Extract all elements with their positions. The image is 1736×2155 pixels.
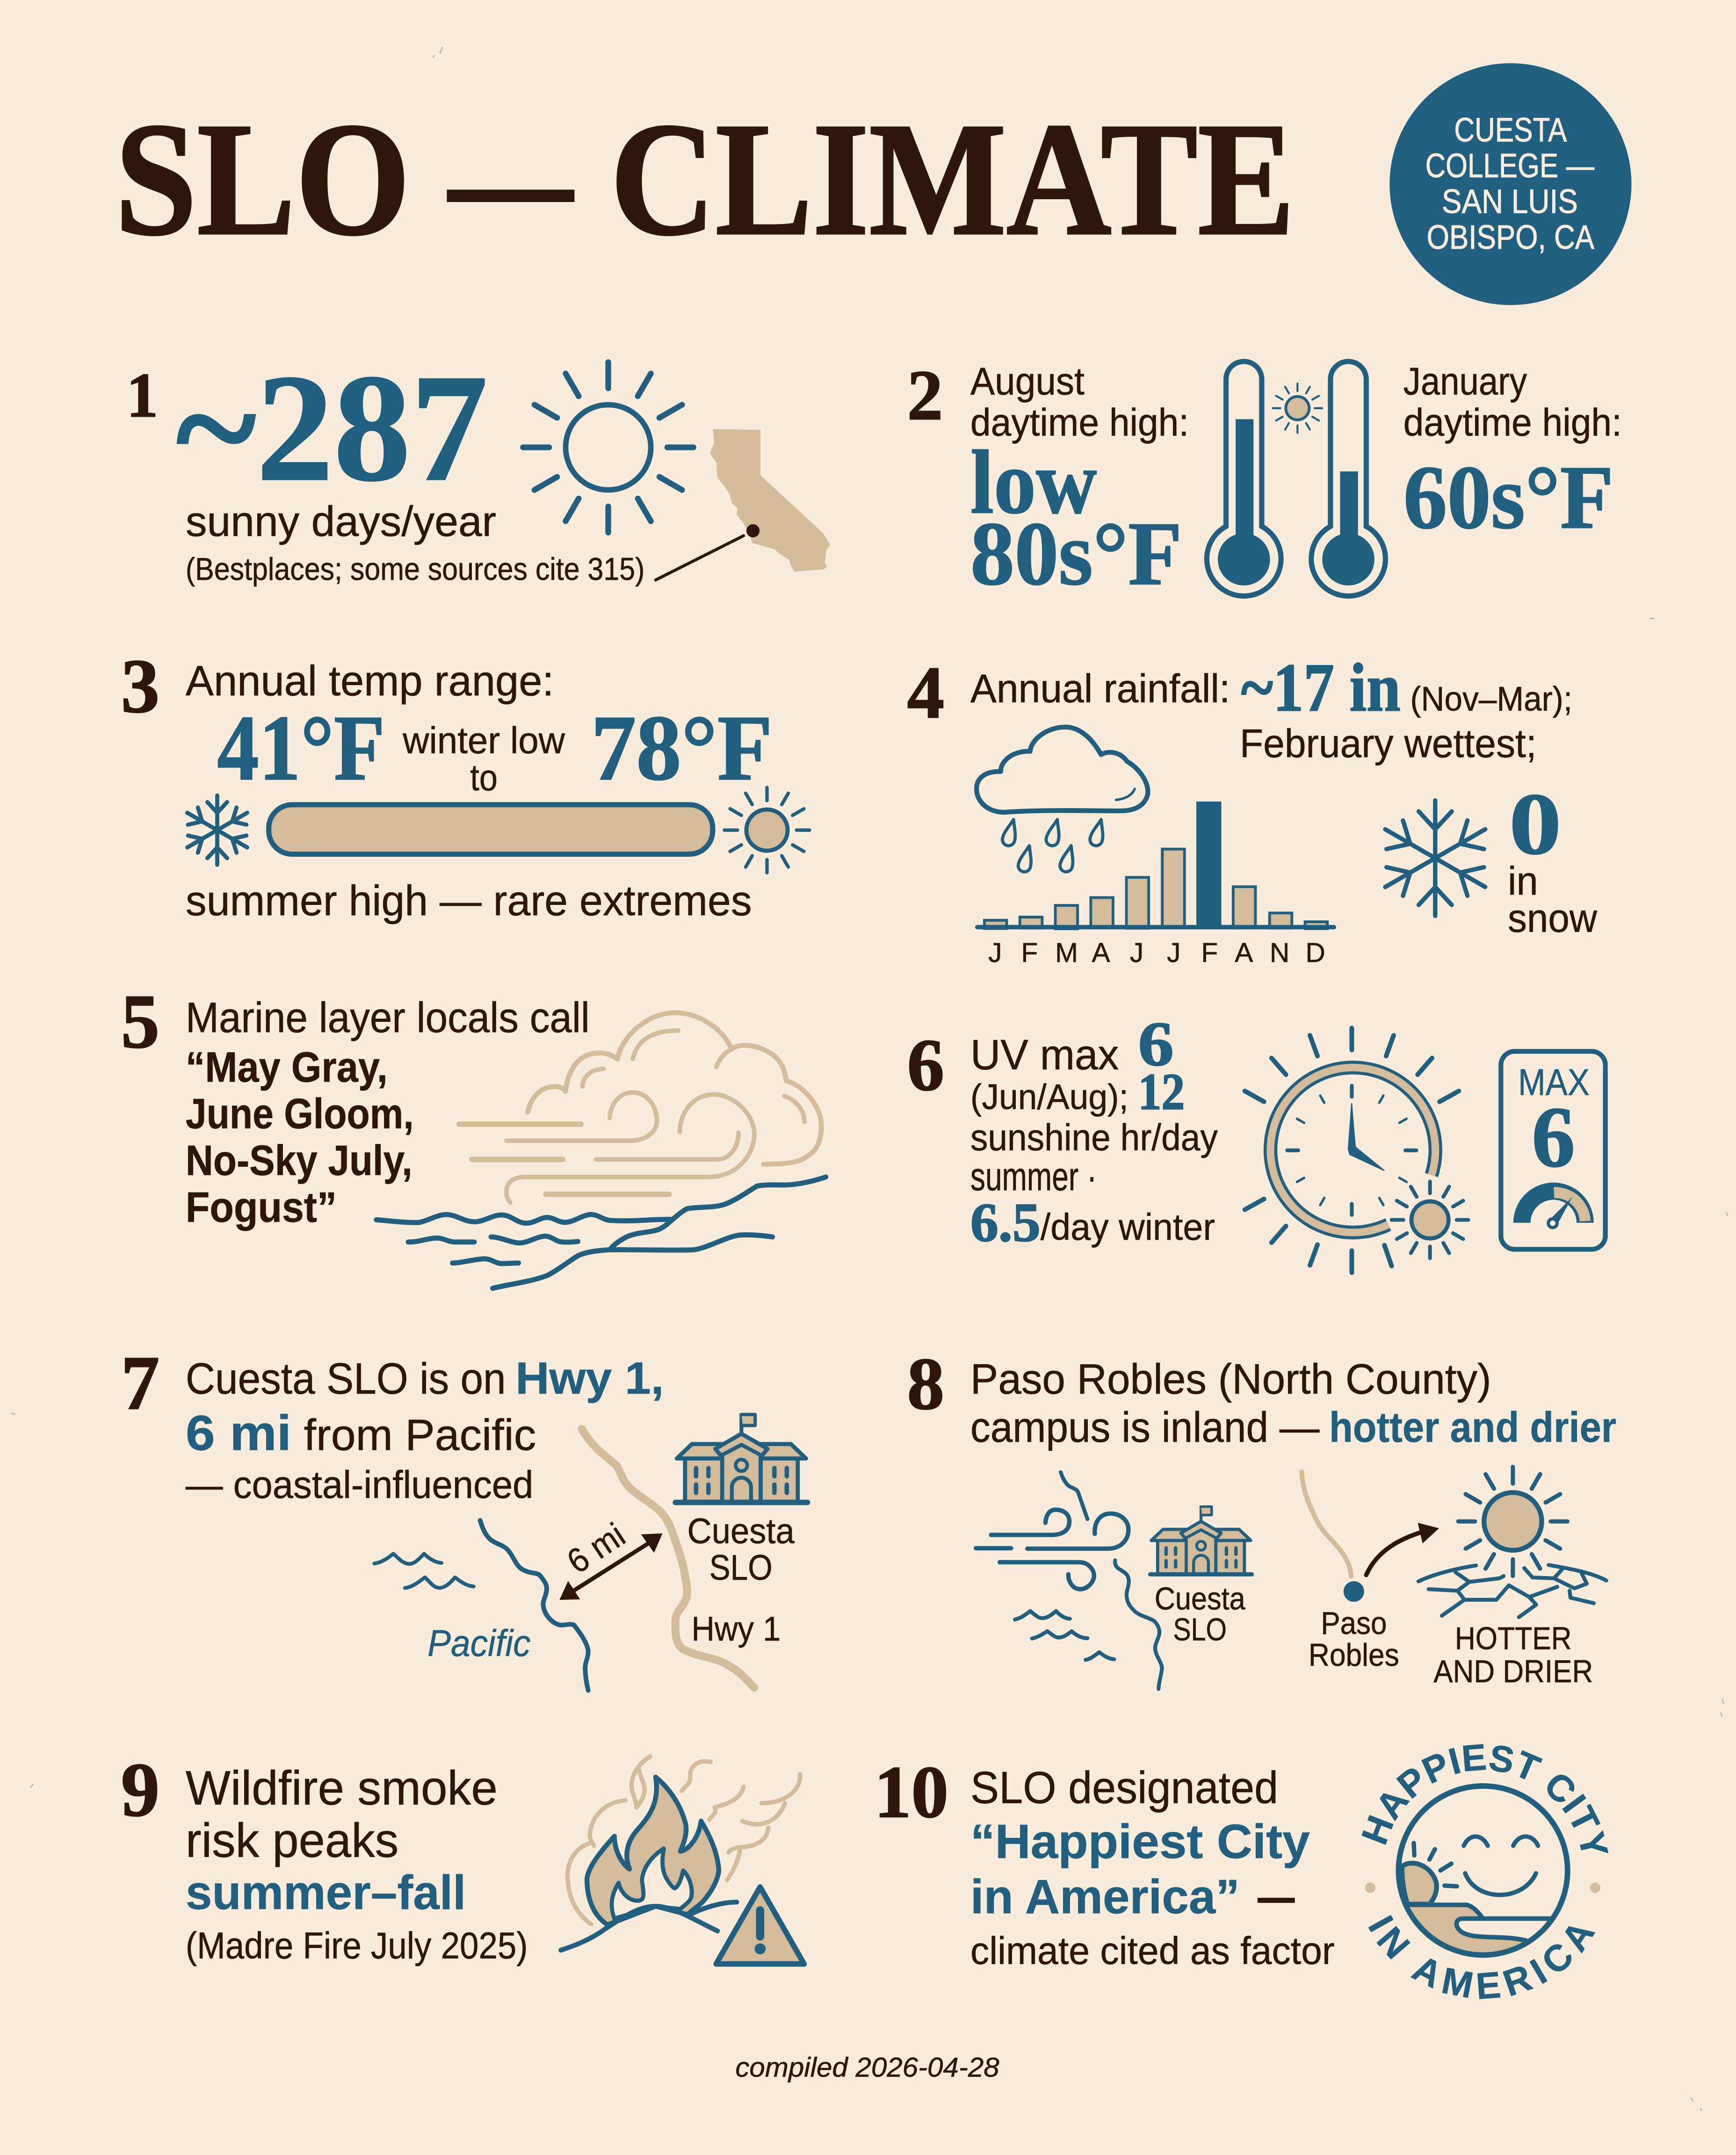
bar chart: F: [1021, 938, 1038, 968]
icon: hot thermometer: [1207, 362, 1281, 596]
number 3: 3: [121, 643, 159, 729]
bold quote: “May Gray,: [186, 1044, 388, 1091]
text block: [970, 1762, 1335, 1973]
panel 7: Cuesta SLO location: [121, 1340, 807, 1691]
label: Cuesta SLO: SLO: [1173, 1612, 1227, 1647]
bar chart: J: [1130, 938, 1143, 968]
panel 5: marine layer: [121, 978, 826, 1288]
label: Cuesta SLO: [687, 1511, 795, 1588]
range bar: [269, 805, 713, 854]
August label: August: [970, 360, 1085, 403]
snow value: snow: [1508, 896, 1597, 940]
UV max card: 6: [1532, 1090, 1575, 1186]
panel 9: wildfire smoke: [121, 1747, 804, 1967]
text block: Cuesta SLO is on: [186, 1354, 506, 1403]
icon: clock with rays: [1245, 1028, 1459, 1273]
icon: snowflake: [182, 795, 252, 865]
badge: happiest city seal: HAPPIEST CITY: [1353, 1736, 1616, 1861]
bold quote: June Gloom,: [186, 1091, 414, 1138]
label: Paso Robles: Robles: [1309, 1638, 1399, 1673]
big stat: ~287: ~287: [176, 343, 488, 513]
winter low to: to: [470, 757, 498, 798]
text block: (Madre Fire July 2025): [186, 1925, 528, 1967]
icon: rain cloud: [976, 727, 1148, 873]
label: Paso Robles: [1309, 1606, 1399, 1673]
intro text: Marine layer locals call: [186, 994, 590, 1041]
label: Hwy 1: Hwy 1: [691, 1609, 781, 1648]
August value: 80s°F: [970, 503, 1182, 604]
label: hotter and drier: HOTTER: [1455, 1621, 1572, 1656]
number 5: 5: [121, 978, 159, 1064]
label: hotter and drier: AND DRIER: [1433, 1654, 1593, 1689]
label: Cuesta SLO: Cuesta: [687, 1511, 795, 1551]
bar chart: M: [1055, 938, 1078, 968]
arrow: 6 mi distance: 6 mi: [560, 1515, 632, 1581]
title: [115, 90, 1295, 269]
map: coastline: [480, 1520, 588, 1691]
bar chart: A: [1092, 938, 1111, 968]
footer: compile date: compiled 2026-04-28: [735, 2052, 999, 2083]
panel 6: UV and sunshine: [907, 1010, 1606, 1273]
panel 10: happiest city: [874, 1736, 1616, 2007]
badge: Cuesta College: SAN LUIS: [1442, 183, 1578, 221]
January label: January: [1403, 360, 1527, 403]
UV max card: [1501, 1051, 1606, 1249]
UV text: summer ·: [970, 1155, 1097, 1199]
title: SLO: [115, 90, 410, 269]
February wettest: February wettest;: [1240, 722, 1537, 766]
text block: from Pacific: [304, 1410, 536, 1459]
number 4: 4: [907, 652, 944, 734]
August value: [970, 432, 1182, 604]
text block: [186, 1352, 664, 1506]
January label: [1403, 360, 1622, 444]
label: Pacific: Pacific: [427, 1622, 531, 1664]
UV text: 12: [1138, 1063, 1185, 1121]
icon: college building: [675, 1413, 807, 1503]
number 10: 10: [874, 1751, 948, 1833]
UV text: (Jun/Aug);: [970, 1078, 1128, 1117]
label: Cuesta SLO: [1155, 1581, 1245, 1647]
label: hotter and drier: [1433, 1621, 1593, 1689]
text block: Hwy 1,: [515, 1352, 664, 1403]
number 6: 6: [907, 1024, 944, 1106]
icon: smoke: [568, 1757, 800, 1924]
icon: cool thermometer: [1311, 362, 1385, 596]
months note: (Nov–Mar);: [1410, 679, 1572, 718]
icon: fog cloud: [459, 1013, 821, 1202]
icon: sun: [523, 362, 694, 533]
bar chart: J: [988, 938, 1002, 968]
bold quote: No-Sky July,: [186, 1137, 412, 1185]
UV text: 6: [1138, 1010, 1174, 1079]
number 9: 9: [121, 1747, 159, 1832]
icon: coast and waves: [1015, 1472, 1162, 1689]
icon: small sun: [1273, 383, 1322, 433]
arrow: toward heat: [1366, 1523, 1439, 1575]
snow value: in: [1508, 859, 1538, 904]
bar chart: F: [1201, 938, 1218, 968]
text block: Paso Robles (North County): [970, 1356, 1491, 1403]
panel 1: sunny days: [127, 343, 830, 587]
UV max card: MAX: [1518, 1061, 1590, 1103]
badge: Cuesta College: CUESTA: [1454, 112, 1567, 149]
panel 2: daytime highs: [907, 356, 1622, 604]
icon: small sun: [1392, 1181, 1468, 1258]
icon: hill: [561, 1902, 737, 1950]
source note: (Bestplaces; some sources cite 315): [186, 552, 644, 587]
rainfall heading: Annual rainfall:: [970, 667, 1230, 711]
UV text: sunshine hr/day: [970, 1117, 1218, 1158]
low value: 41°F: [217, 696, 385, 800]
bar chart: J: [1167, 938, 1181, 968]
arrow: 6 mi distance: [559, 1515, 663, 1600]
text block: —: [1258, 1870, 1295, 1924]
title: CLIMATE: [610, 90, 1295, 269]
map: highway 1: [582, 1429, 754, 1688]
bar chart: [977, 802, 1334, 968]
UV text: [970, 1010, 1218, 1253]
high value: 78°F: [591, 696, 773, 800]
UV text: 6.5: [970, 1193, 1041, 1253]
UV text: UV max: [970, 1031, 1119, 1078]
icon: warning triangle: [716, 1887, 804, 1964]
panel 4: rainfall: [907, 649, 1597, 968]
text block: [186, 1761, 528, 1967]
number 7: 7: [121, 1340, 159, 1425]
text block: Wildfire smoke: [186, 1761, 498, 1815]
icon: ocean and coast: [376, 1177, 826, 1288]
text block: in America”: [970, 1870, 1240, 1924]
bar chart: N: [1270, 938, 1289, 968]
text block: “Happiest City: [970, 1815, 1310, 1868]
bold quote: [186, 1044, 414, 1231]
label: Cuesta SLO: Cuesta: [1155, 1581, 1245, 1616]
number 2: 2: [907, 356, 943, 435]
map: waves: [374, 1554, 474, 1588]
text block: hotter and drier: [1329, 1404, 1616, 1451]
winter low to: winter low: [402, 719, 565, 761]
text block: risk peaks: [186, 1813, 398, 1867]
UV text: /day winter: [1041, 1206, 1215, 1248]
number 1: 1: [127, 361, 158, 430]
icon: wind: [976, 1510, 1128, 1589]
badge: Cuesta College: [1389, 63, 1631, 305]
icon: college building: [1150, 1505, 1252, 1574]
text block: — coastal-influenced: [186, 1464, 533, 1506]
January value: 60s°F: [1403, 447, 1613, 547]
icon: hot sun: [1458, 1467, 1567, 1576]
map: Paso Robles dot: [1344, 1581, 1364, 1602]
text block: climate cited as factor: [970, 1930, 1335, 1973]
map: Paso Robles road: [1302, 1472, 1351, 1576]
badge: Cuesta College: COLLEGE —: [1425, 147, 1594, 185]
badge: Cuesta College: OBISPO, CA: [1427, 219, 1594, 256]
icon: large snowflake: [1377, 801, 1493, 916]
bold quote: Fogust”: [186, 1184, 337, 1231]
August label: [970, 360, 1189, 444]
August value: low: [970, 432, 1097, 532]
snow value: 0: [1509, 775, 1562, 873]
badge: happiest city seal: [1353, 1736, 1616, 2007]
text block: [970, 1356, 1616, 1451]
snow value: [1508, 775, 1597, 940]
label: Cuesta SLO: SLO: [709, 1548, 773, 1588]
panel 3: temperature range: [121, 643, 810, 925]
title: —: [446, 90, 575, 269]
January label: daytime high:: [1403, 402, 1622, 444]
bar chart: A: [1235, 938, 1253, 968]
rainfall value: ~17 in: [1241, 649, 1401, 725]
text block: campus is inland —: [970, 1404, 1320, 1451]
caption: summer high — rare extremes: [186, 877, 752, 925]
label: Paso Robles: Paso: [1321, 1606, 1387, 1641]
label: sunny days/year: sunny days/year: [186, 498, 496, 545]
panel 8: Paso Robles: [907, 1343, 1616, 1689]
text block: 6 mi: [186, 1405, 291, 1461]
heading: Annual temp range:: [186, 658, 554, 705]
text block: SLO designated: [970, 1762, 1278, 1813]
icon: cracked earth: [1418, 1565, 1606, 1617]
number 8: 8: [907, 1343, 944, 1425]
icon: sun: [724, 788, 810, 873]
icon: flame: [587, 1777, 719, 1925]
icon: California map: [656, 429, 830, 580]
August label: daytime high:: [970, 402, 1189, 444]
badge: happiest city seal: IN AMERICA: [1360, 1908, 1606, 2007]
text block: summer–fall: [186, 1866, 466, 1919]
bar chart: D: [1305, 938, 1325, 968]
winter low to: [402, 719, 565, 798]
